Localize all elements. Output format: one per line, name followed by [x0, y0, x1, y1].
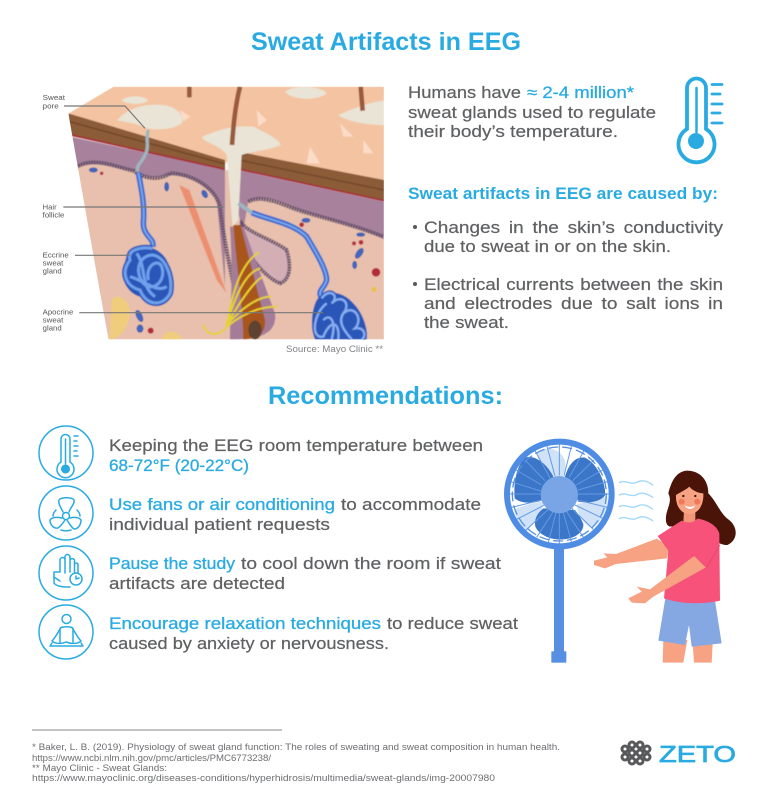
skin surface — [68, 87, 384, 195]
icon: large thermometer — [678, 78, 722, 162]
hair — [666, 471, 736, 545]
bullet: electrical currents: Electrical currents between the skin — [424, 276, 723, 294]
woman — [594, 471, 736, 663]
neck — [683, 512, 695, 524]
grill spokes — [509, 443, 609, 545]
bullet: electrical currents — [413, 276, 723, 332]
text: artifacts are detected — [109, 575, 285, 593]
recommendation 2: fans — [39, 486, 481, 540]
icon: thermometer — [39, 426, 93, 480]
dermis tissue — [70, 137, 384, 339]
purple dermis layer — [70, 137, 384, 287]
shirt — [658, 519, 720, 603]
hair follicle root — [230, 227, 275, 339]
illustration: sweat gland skin cross-section — [30, 80, 392, 350]
bullet: skin conductivity — [413, 219, 724, 256]
labels: Eccrine — [43, 251, 69, 260]
recommendation 3: pause — [39, 546, 501, 600]
shorts — [658, 598, 722, 647]
fan head — [507, 442, 612, 546]
sweat pools — [117, 87, 384, 227]
text: to accommodate — [341, 496, 481, 514]
text block: sweat gland count: sweat glands used to regulate — [408, 104, 656, 122]
white mask — [30, 80, 392, 350]
logo: Zeto — [622, 741, 736, 767]
logo mark — [622, 742, 650, 764]
subheading: causes: Sweat artifacts in EEG are caused by: — [408, 185, 718, 203]
footnotes: https://www.ncbi.nlm.nih.gov/pmc/articles/PMC6773238/ — [32, 753, 271, 764]
text — [109, 555, 501, 593]
heading: recommendations: Recommendations: — [268, 382, 503, 410]
legs — [663, 640, 713, 663]
bullet: electrical currents: the sweat. — [424, 314, 509, 332]
erector muscle — [179, 185, 227, 293]
pale rear blades — [537, 449, 566, 478]
text: Keeping the EEG room temperature between — [109, 437, 483, 455]
icon: hand and clock — [39, 546, 93, 600]
bullet: electrical currents: and electrodes due to salt ions in — [424, 295, 723, 313]
footnotes: * Baker, L. B. (2019). Physiology of sweat gland function: The roles of sweating and sweat composition in human health. — [32, 742, 560, 753]
text block: sweat gland count: Humans have — [408, 84, 521, 102]
dotted basal layer — [76, 162, 233, 283]
face — [676, 487, 703, 514]
footnotes: https://www.mayoclinic.org/diseases-conditions/hyperhidrosis/multimedia/sweat-glands/img-20007980 — [32, 773, 495, 784]
text block: sweat gland count — [408, 84, 656, 141]
text: individual patient requests — [109, 516, 330, 534]
arm back — [594, 539, 670, 568]
text — [109, 437, 483, 475]
text: Pause the study — [109, 555, 236, 573]
text — [109, 615, 518, 653]
artwork layers — [68, 87, 384, 339]
logo wordmark: ZETO — [659, 741, 736, 767]
sebaceous pouch — [240, 223, 289, 283]
eccrine gland coil — [123, 247, 173, 306]
recommendation 1: temperature — [39, 426, 483, 480]
fan hub — [541, 476, 578, 513]
labels: pore — [43, 101, 59, 110]
text block: sweat gland count: ≈ 2-4 million* — [527, 84, 635, 102]
recommendation 4: relaxation — [39, 605, 518, 659]
footnotes: ** Mayo Clinic - Sweat Glands: — [32, 763, 167, 774]
eccrine duct — [137, 130, 148, 172]
text: Use fans or air conditioning — [109, 496, 335, 514]
text: caused by anxiety or nervousness. — [109, 635, 389, 653]
labels: sweat — [43, 316, 64, 325]
labels: gland — [43, 267, 62, 276]
text — [109, 496, 481, 534]
fat tissue — [109, 297, 183, 339]
labels: Hair — [43, 203, 57, 212]
apocrine duct — [238, 203, 252, 213]
nerves — [203, 253, 277, 334]
fan stand — [551, 547, 566, 663]
footnote rule — [32, 730, 282, 731]
text: 68-72°F (20-22°C) — [109, 457, 249, 475]
epidermis band — [68, 113, 225, 169]
bullet: skin conductivity: due to sweat in or on the skin. — [424, 238, 671, 256]
text block: sweat gland count: their body’s temperature. — [408, 123, 618, 141]
labels — [43, 93, 73, 333]
apocrine gland coil — [312, 293, 367, 339]
text: to cool down the room if sweat — [241, 555, 501, 573]
text: to reduce sweat — [387, 615, 518, 633]
text: Encourage relaxation techniques — [109, 615, 381, 633]
vessels — [89, 168, 365, 332]
image source caption: Source: Mayo Clinic ** — [286, 344, 383, 355]
footnotes — [32, 742, 560, 784]
labels: sweat — [43, 259, 64, 268]
label lines — [63, 106, 323, 313]
labels: follicle — [43, 211, 64, 220]
illustration: fan and woman — [507, 442, 736, 663]
bullet: skin conductivity: Changes in the skin’s conductivity — [424, 219, 724, 237]
icon: meditation — [39, 605, 93, 659]
labels: gland — [43, 324, 62, 333]
labels: Apocrine — [43, 308, 73, 317]
red line — [71, 135, 384, 201]
fan ring — [507, 442, 612, 546]
air waves — [619, 481, 653, 521]
hair shafts — [189, 87, 363, 145]
labels: Sweat — [43, 93, 66, 102]
dark front blades — [514, 457, 553, 503]
icon: fan — [39, 486, 93, 540]
title: Sweat Artifacts in EEG — [251, 28, 521, 56]
arm front — [628, 556, 706, 603]
